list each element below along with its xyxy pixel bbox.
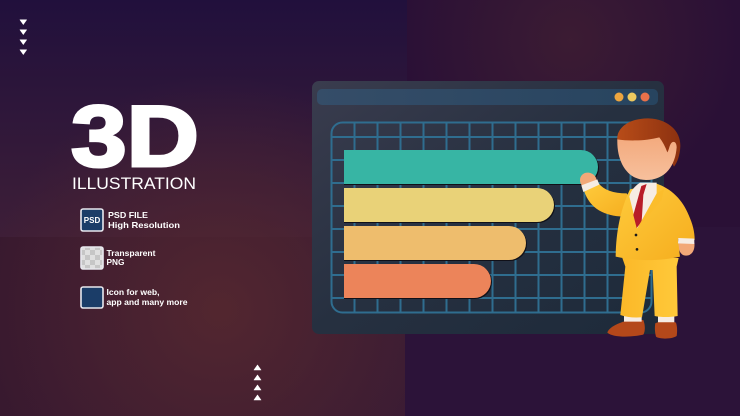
feature: transparent PNG: Transparent — [106, 249, 156, 258]
face — [617, 137, 677, 180]
window control dots — [614, 92, 650, 102]
chart grid — [331, 122, 652, 312]
icon: up arrows — [254, 365, 261, 400]
feature: PSD file: PSD — [84, 216, 100, 225]
jacket buttons — [635, 234, 638, 251]
feature: icon for web: Icon for web, — [106, 288, 160, 297]
subtitle: illustration: ILLUSTRATION — [72, 175, 196, 193]
feature: icon for web — [81, 287, 188, 308]
jacket — [616, 183, 695, 260]
character: businessman in yellow suit — [580, 118, 695, 339]
feature: transparent PNG — [81, 247, 156, 269]
right hand — [678, 243, 694, 256]
left hand — [580, 173, 597, 187]
title: 3D: 3D — [71, 89, 199, 185]
trousers — [620, 258, 679, 318]
panel: chart window — [312, 81, 664, 334]
shirt — [629, 183, 657, 228]
feature: PSD file — [81, 209, 180, 231]
cuff — [581, 179, 599, 192]
hair — [617, 118, 680, 167]
feature: PSD file: High Resolution — [108, 220, 180, 230]
feature: PSD file: PSD FILE — [108, 210, 148, 220]
feature: icon for web: app and many more — [106, 298, 188, 307]
window title bar — [317, 89, 658, 105]
raised arm — [584, 183, 632, 217]
right shoe — [655, 321, 677, 339]
right cuff — [678, 238, 694, 244]
feature: transparent PNG: PNG — [106, 258, 124, 267]
icon: down arrows — [20, 20, 27, 54]
left shoe — [607, 320, 645, 337]
tie — [633, 184, 647, 228]
jacket lapel — [637, 189, 664, 228]
bar chart — [344, 150, 599, 299]
socks — [624, 315, 674, 322]
